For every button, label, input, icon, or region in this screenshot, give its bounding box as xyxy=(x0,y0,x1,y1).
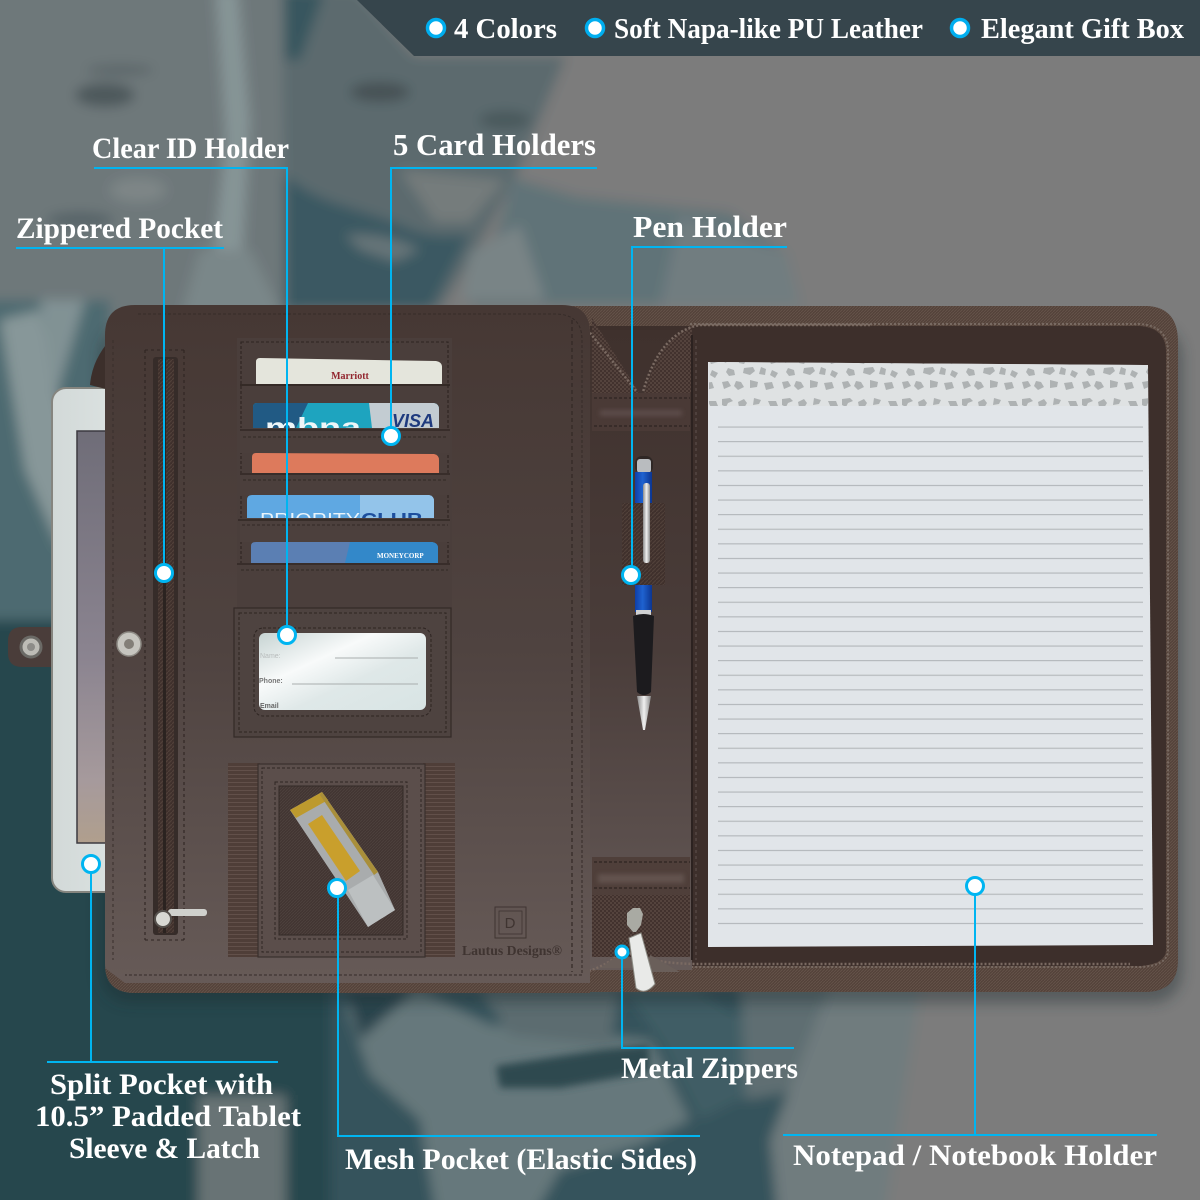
clear ID pocket: Email xyxy=(260,703,279,710)
callout: 5 Card Holders xyxy=(382,127,597,444)
pen holder loop xyxy=(622,483,665,585)
card: mbna Visa: mbna xyxy=(265,412,362,442)
mesh pocket with elastic sides xyxy=(228,763,455,957)
snap button xyxy=(117,632,141,656)
pocket slot covering mbna xyxy=(240,428,450,453)
bottom zipper curve xyxy=(585,950,1130,972)
centre dark area below folder xyxy=(330,985,840,1200)
dark clothing, lower left xyxy=(0,620,340,1200)
callout: Split Pocket with Tablet Sleeve: Sleeve & Latch xyxy=(69,1132,260,1165)
watch strap and right side of man xyxy=(740,985,920,1200)
tape bulge behind cover xyxy=(90,340,110,390)
top feature bar xyxy=(357,0,1200,56)
hands and phone xyxy=(345,985,760,1200)
card: mbna Visa: VISA xyxy=(392,411,434,431)
card: Priority Club: PRIORITY xyxy=(260,510,360,530)
bullet: 4 Colors: 4 Colors xyxy=(454,13,557,45)
clear ID pocket xyxy=(234,608,451,737)
card: mbna Visa xyxy=(253,403,439,442)
card: orange xyxy=(252,453,439,473)
open padfolio xyxy=(8,305,1182,1003)
callout: Split Pocket with Tablet Sleeve: Split Pocket with xyxy=(50,1068,273,1101)
bullet: Soft Napa-like PU Leather: Soft Napa-like PU Leather xyxy=(614,13,923,45)
clear ID pocket: Name: xyxy=(260,653,281,660)
man's jacket and shirt collar xyxy=(462,178,800,305)
callout: Metal Zippers: Metal Zippers xyxy=(621,1052,798,1085)
card holder block xyxy=(237,338,452,610)
spine and pen column xyxy=(575,314,1130,972)
bullet: Elegant Gift Box: Elegant Gift Box xyxy=(981,13,1184,45)
sleeve strip bottom left xyxy=(198,1095,286,1200)
tablet in split pocket xyxy=(52,388,142,892)
callout: Pen Holder xyxy=(622,209,787,584)
notepad xyxy=(708,362,1153,947)
right panel with zip border xyxy=(570,306,1178,992)
card: Moneycorp: MONEYCORP xyxy=(377,552,424,560)
zipper pull on pocket xyxy=(155,909,207,927)
callout: Notepad / Notebook Holder xyxy=(783,878,1157,1172)
latch strap xyxy=(8,627,60,667)
woman's face and hair, upper left xyxy=(0,0,300,330)
callout: Clear ID Holder xyxy=(92,132,296,644)
card: Marriott: Marriott xyxy=(331,371,370,382)
pocket edge under Marriott xyxy=(240,384,450,386)
callout: Split Pocket with Tablet Sleeve: 10.5” Padded Tablet xyxy=(35,1100,301,1133)
phone held in hand xyxy=(496,1045,650,1088)
zippered pocket xyxy=(145,350,184,940)
card: Moneycorp xyxy=(251,542,438,563)
card: Priority Club: CLUB xyxy=(361,510,423,530)
man's face, centre top xyxy=(282,0,566,310)
callout: Mesh Pocket xyxy=(328,880,700,1176)
Lautus Designs embossed logo: D xyxy=(505,915,516,932)
card: Marriott xyxy=(256,358,442,384)
callout: Metal Zippers xyxy=(616,946,798,1085)
bottom strap xyxy=(592,857,690,895)
hair wisps beside folder xyxy=(0,300,110,640)
metal zipper pull xyxy=(627,908,655,991)
top strap xyxy=(592,393,690,431)
callout: Split Pocket with Tablet Sleeve xyxy=(35,856,301,1165)
callout: 5 Card Holders: 5 Card Holders xyxy=(393,127,596,162)
card: Priority Club xyxy=(247,495,434,530)
left leather cover xyxy=(105,305,590,993)
callout: Pen Holder: Pen Holder xyxy=(633,209,787,244)
callout: Clear ID Holder: Clear ID Holder xyxy=(92,132,289,165)
callout: Notepad / Notebook Holder: Notepad / Notebook Holder xyxy=(793,1139,1157,1172)
callout: Zippered Pocket: Zippered Pocket xyxy=(16,212,223,245)
Lautus Designs embossed logo xyxy=(462,907,562,958)
Lautus Designs embossed logo: Lautus Designs® xyxy=(462,943,562,958)
callout: Zippered Pocket xyxy=(16,212,224,582)
pen xyxy=(633,456,654,730)
callout: Mesh Pocket: Mesh Pocket (Elastic Sides) xyxy=(345,1143,697,1176)
clear ID pocket: Phone: xyxy=(259,678,283,685)
USB drive xyxy=(290,792,395,927)
